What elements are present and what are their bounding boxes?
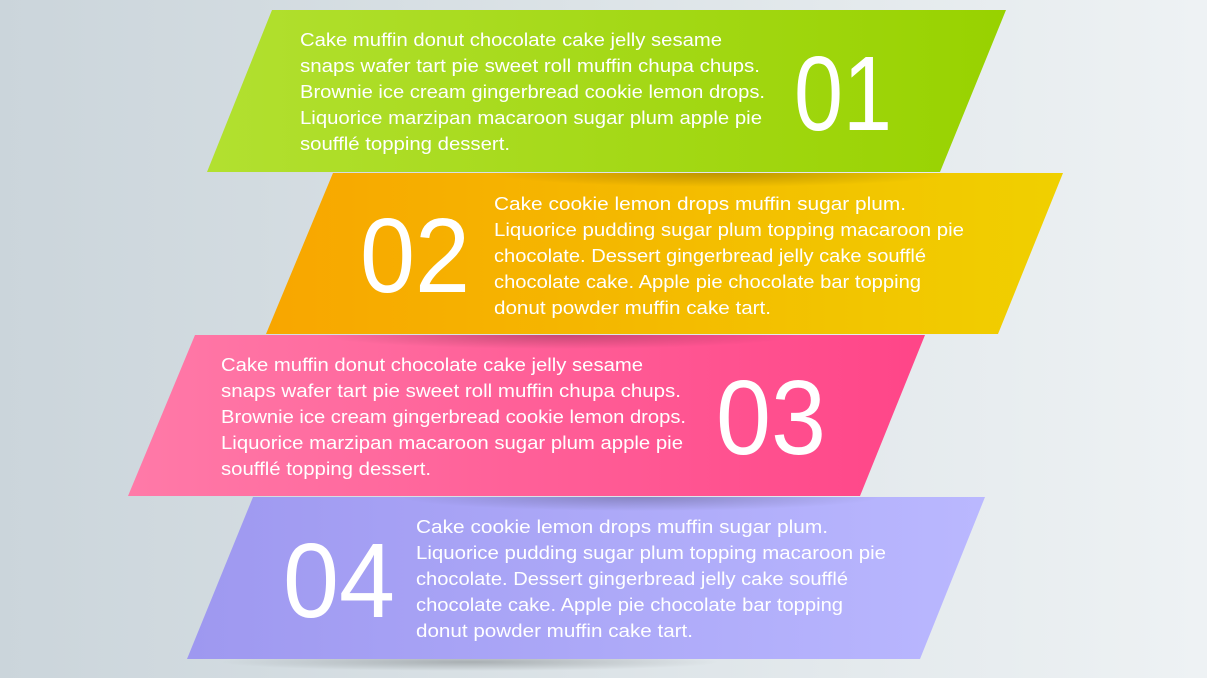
text block 03: Liquorice marzipan macaroon sugar plum apple pie: [221, 433, 683, 453]
text block 04: Cake cookie lemon drops muffin sugar plum.: [416, 517, 828, 537]
text block 02: [494, 194, 964, 318]
panel: band 04: [187, 483, 985, 659]
text block 02: chocolate cake. Apple pie chocolate bar topping: [494, 272, 921, 292]
text block 02: Cake cookie lemon drops muffin sugar plum.: [494, 194, 906, 214]
text block 04: Liquorice pudding sugar plum topping macaroon pie: [416, 543, 886, 563]
text block 01: Brownie ice cream gingerbread cookie lemon drops.: [300, 82, 765, 102]
number 04: 04: [283, 522, 395, 640]
text block 01: [300, 30, 765, 154]
panel: band 01: [207, 10, 1006, 172]
text block 03: snaps wafer tart pie sweet roll muffin chupa chups.: [221, 381, 681, 401]
shadow under band 4: [220, 653, 720, 671]
text block 02: donut powder muffin cake tart.: [494, 298, 771, 318]
text block 02: chocolate. Dessert gingerbread jelly cake soufflé: [494, 246, 926, 266]
text block 01: Liquorice marzipan macaroon sugar plum apple pie: [300, 108, 762, 128]
text block 03: Cake muffin donut chocolate cake jelly sesame: [221, 355, 643, 375]
text block 04: chocolate. Dessert gingerbread jelly cake soufflé: [416, 569, 848, 589]
number 02: 02: [360, 197, 470, 315]
text block 04: donut powder muffin cake tart.: [416, 621, 693, 641]
number 03: 03: [716, 359, 826, 477]
panel: band 02: [266, 159, 1063, 334]
text block 02: Liquorice pudding sugar plum topping macaroon pie: [494, 220, 964, 240]
text block 04: chocolate cake. Apple pie chocolate bar topping: [416, 595, 843, 615]
text block 01: soufflé topping dessert.: [300, 134, 510, 154]
text block 01: snaps wafer tart pie sweet roll muffin chupa chups.: [300, 56, 760, 76]
text block 03: soufflé topping dessert.: [221, 459, 431, 479]
text block 03: [221, 355, 686, 479]
text block 01: Cake muffin donut chocolate cake jelly sesame: [300, 30, 722, 50]
number 01: 01: [794, 35, 892, 153]
panel: band 03: [128, 321, 925, 496]
text block 03: Brownie ice cream gingerbread cookie lemon drops.: [221, 407, 686, 427]
text block 04: [416, 517, 886, 641]
